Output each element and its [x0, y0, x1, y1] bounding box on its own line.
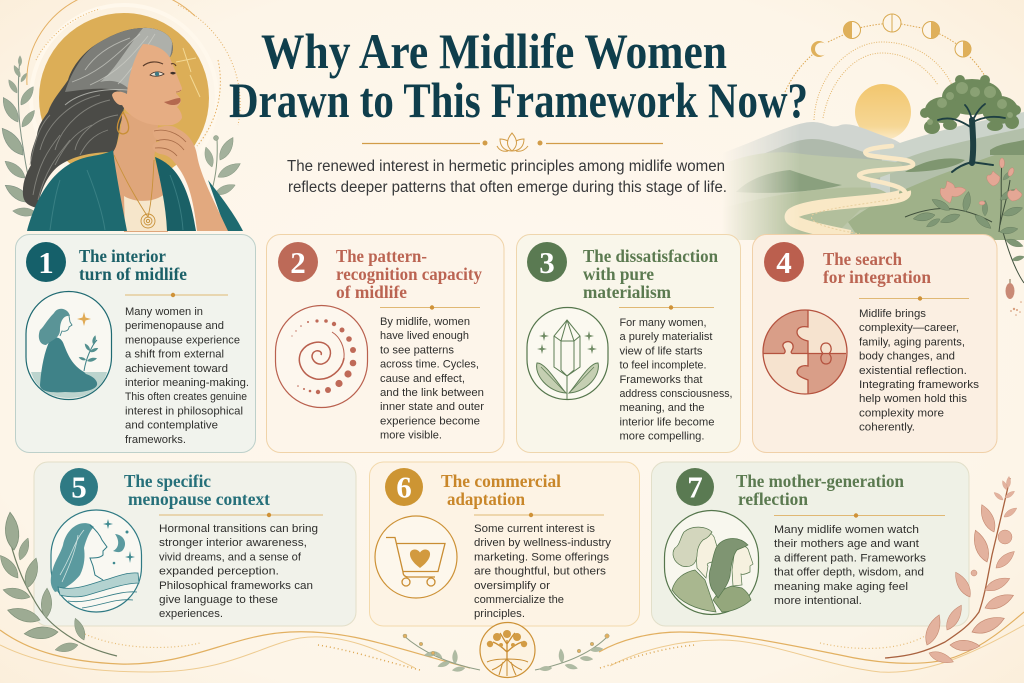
panel: card 4: coherently. [859, 422, 915, 434]
panel: card 4: complexity—career, [859, 322, 959, 334]
illustration: moon phases arc [785, 14, 990, 120]
panel: card 3: materialism [583, 282, 671, 302]
panel: card 1: turn of midlife [79, 264, 187, 284]
illustration: flowering branch [905, 158, 1024, 316]
panel: card 4: 4 [776, 245, 792, 280]
panel: card 6: oversimplify or [474, 580, 550, 592]
sprig left [0, 56, 37, 217]
panel: card 2: inner state and outer [380, 401, 484, 413]
panel: card 6 [370, 462, 640, 626]
illustration: woman in profile with halo [0, 0, 243, 232]
panel: card 4: for integration [823, 267, 931, 287]
panel: card 5: expanded perception. [159, 566, 279, 578]
panel: card 3: 3 [539, 245, 555, 280]
subtitle [287, 158, 727, 196]
panel: card 2: of midlife [336, 282, 407, 302]
hair [23, 28, 173, 208]
panel: card 4: complexity more [859, 407, 944, 419]
illustration: green branch bottom left [0, 512, 117, 656]
panel: card 5: menopause context [128, 489, 270, 509]
panel: card 5: vivid dreams, and a sense of [159, 551, 302, 563]
panel: card 6: commercialize the [474, 594, 564, 606]
panel: card 6: driven by wellness-industry [474, 537, 611, 549]
panel: card 6: 6 [396, 470, 412, 504]
panel: card 7: meaning make aging feel [774, 581, 908, 593]
panel: card 7 [652, 462, 969, 626]
panel: card 1: perimenopause and [125, 320, 224, 332]
panel: card 1: menopause experience [125, 334, 240, 346]
panel: card 6: are thoughtful, but others [474, 566, 606, 578]
panel: card 7: The mother-generation [736, 471, 904, 491]
title divider with lotus [362, 133, 663, 151]
subtitle: The renewed interest in hermetic principles among midlife women [287, 158, 725, 175]
panel: card 2: across time. Cycles, [380, 359, 479, 371]
panel: card 2: 2 [290, 245, 306, 280]
panel: card 1 [16, 234, 256, 452]
panel: card 2: cause and effect, [380, 373, 465, 385]
panel: card 7: their mothers age and want [774, 538, 920, 550]
panel: card 2: and the link between [380, 387, 484, 399]
panel: card 5: give language to these [159, 594, 278, 606]
illustration: small sprig left of tree [403, 634, 480, 672]
panel: card 5: 5 [71, 470, 87, 504]
panel: card 1: a shift from external [125, 349, 224, 361]
panel: card 6: marketing. Some offerings [474, 551, 609, 563]
panel: card 3 [516, 234, 740, 452]
panel: card 3: to feel incomplete. [620, 360, 706, 372]
illustration: landscape with sun, hills, winding path and tree [700, 75, 1024, 240]
panel: card 3: Frameworks that [620, 374, 703, 386]
panel: card 5: Hormonal transitions can bring [159, 523, 318, 535]
icon: meditating woman [26, 292, 112, 400]
decorative wavy lines [0, 612, 1024, 672]
panel: card 4: Integrating frameworks [859, 379, 979, 391]
earring [117, 112, 129, 134]
panel: card 3: interior life become [620, 416, 714, 428]
panel: card 2: more visible. [380, 430, 442, 442]
panel: card 3: a purely materialist [620, 331, 713, 343]
title: Why Are Midlife Women [261, 23, 727, 79]
panel: card 1: The interior [79, 246, 166, 266]
panel: card 2 [266, 234, 504, 452]
hand and arm [152, 126, 228, 231]
icon: woman profile with moon and waves [51, 510, 142, 612]
title: Drawn to This Framework Now? [229, 72, 808, 128]
panel: card 5: experiences. [159, 608, 223, 620]
panel: card 2: By midlife, women [380, 316, 470, 328]
panel: card 7: a different path. Frameworks [774, 552, 926, 564]
panel: card 4: The search [823, 249, 902, 269]
panel: card 3: view of life starts [620, 345, 703, 357]
panel: card 7: that offer depth, wisdom, and [774, 567, 924, 579]
panel: card 1: interest in philosophical [125, 405, 243, 417]
icon: shopping cart with heart [375, 516, 457, 598]
panel: card 4: body changes, and [859, 351, 955, 363]
subtitle: reflects deeper patterns that often emerge during this stage of life. [288, 179, 727, 196]
panel: card 1: frameworks. [125, 434, 186, 446]
panel: card 5: Philosophical frameworks can [159, 580, 313, 592]
shawl [27, 150, 127, 231]
panel: card 2: to see patterns [380, 344, 454, 356]
panel: card 1: and contemplative [125, 420, 218, 432]
panel: card 6: adaptation [447, 489, 525, 509]
panel: card 7: more intentional. [774, 595, 862, 607]
icon: tree of life emblem [480, 622, 535, 678]
panel: card 3: address consciousness, [620, 388, 732, 400]
icon: spiral of dots [276, 306, 368, 408]
panel: card 4 [752, 234, 997, 452]
panel: card 1: Many women in [125, 306, 203, 318]
necklace [114, 155, 155, 228]
panel: card 4: existential reflection. [859, 365, 967, 377]
panel: card 1: This often creates genuine [125, 391, 247, 403]
panel: card 4: help women hold this [859, 393, 967, 405]
panel: card 2: experience become [380, 415, 480, 427]
title [229, 23, 808, 128]
panel: card 7: reflection [738, 489, 808, 509]
illustration: pink branch bottom right [885, 476, 1018, 666]
panel: card 2: have lived enough [380, 330, 469, 342]
panel: card 3: The dissatisfaction [583, 246, 718, 266]
icon: puzzle circle [763, 310, 847, 394]
panel: card 7: Many midlife women watch [774, 524, 919, 536]
panel: card 3: meaning, and the [620, 402, 704, 414]
panel: card 2: The pattern- [336, 246, 427, 266]
panel: card 7: 7 [687, 470, 703, 504]
panel: card 4: family, aging parents, [859, 336, 965, 348]
panel: card 5 [34, 462, 356, 626]
panel: card 3: For many women, [620, 317, 706, 329]
panel: card 4: Midlife brings [859, 308, 926, 320]
panel: card 5: stronger interior awareness, [159, 537, 307, 549]
panel: card 5: The specific [124, 471, 211, 491]
sprig right [202, 135, 243, 197]
panel: card 2: recognition capacity [336, 264, 482, 284]
panel: card 6: Some current interest is [474, 523, 595, 535]
face [112, 44, 182, 125]
panel: card 3: with pure [583, 264, 654, 284]
neck and chest [113, 112, 168, 232]
panel: card 6: principles. [474, 608, 525, 620]
panel: card 3: more compelling. [620, 431, 704, 443]
panel: card 1: achievement toward [125, 363, 228, 375]
icon: mother and daughter profiles [664, 510, 758, 614]
illustration: small sprig right of tree [535, 634, 609, 671]
panel: card 1: 1 [38, 245, 54, 280]
icon: crystal with leaves [527, 308, 608, 400]
panel: card 6: The commercial [441, 471, 561, 491]
panel: card 1: interior meaning-making. [125, 377, 249, 389]
